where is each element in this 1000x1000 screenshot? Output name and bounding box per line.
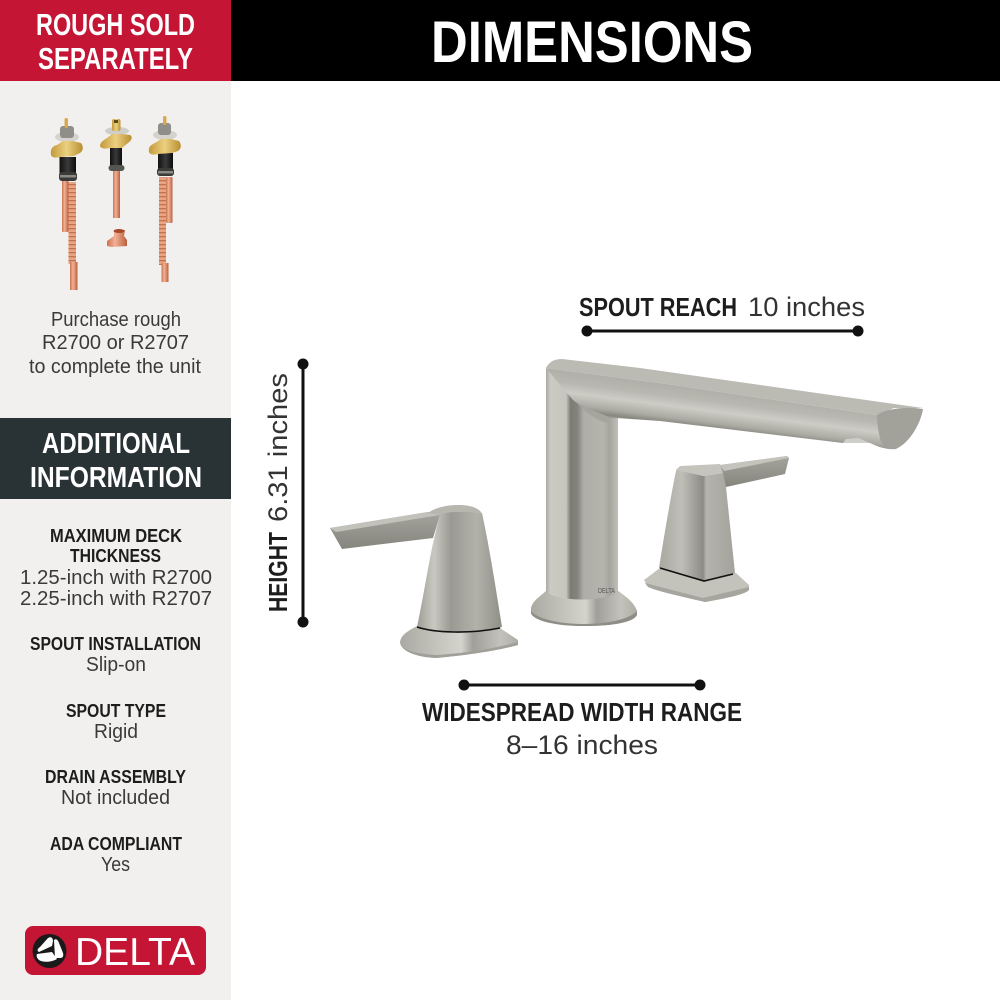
- sidebar panel: [0, 0, 231, 1000]
- text: purchase rough note: [29, 309, 201, 378]
- image: rough-in valves: [51, 116, 181, 290]
- spec: maximum deck thickness: 2.25-inch with R2707: [20, 588, 212, 610]
- faucet right handle: [644, 456, 789, 602]
- banner: rough sold separately: SEPARATELY: [38, 42, 193, 76]
- valve left: [51, 118, 83, 290]
- spec: ada compliant: Yes: [101, 854, 130, 876]
- faucet spout: DELTA: [598, 588, 615, 595]
- text: purchase rough note: to complete the unit: [29, 356, 201, 378]
- banner: rough sold separately: ROUGH SOLD: [36, 8, 195, 42]
- spec: maximum deck thickness: THICKNESS: [70, 546, 161, 566]
- spec: ada compliant: ADA COMPLIANT: [50, 834, 182, 854]
- spec: maximum deck thickness: [20, 526, 212, 610]
- faucet spout: [531, 359, 923, 626]
- banner: additional information: [0, 418, 231, 499]
- logo: Delta: [25, 926, 206, 975]
- faucet left handle: [330, 505, 518, 658]
- dimension: spout reach: 10 inches: [748, 292, 865, 322]
- dimension: height: 6.31 inches: [263, 373, 293, 522]
- spec: ada compliant: [50, 834, 182, 876]
- faucet illustration: [330, 359, 923, 658]
- banner: additional information: ADDITIONAL: [42, 428, 190, 460]
- valve right: [149, 116, 181, 282]
- dimension: height: [263, 358, 308, 628]
- dimension: spout reach: [579, 292, 865, 336]
- text: purchase rough note: Purchase rough: [51, 309, 181, 331]
- dimension: widespread width range: 8–16 inches: [506, 730, 658, 760]
- copper tee fitting: [107, 229, 127, 247]
- text: purchase rough note: R2700 or R2707: [42, 332, 189, 354]
- dimension: spout reach: SPOUT REACH: [579, 292, 737, 322]
- banner: rough sold separately: [0, 0, 231, 81]
- spec: spout type: [66, 701, 166, 743]
- title bar: dimensions: DIMENSIONS: [431, 10, 753, 75]
- title bar: dimensions: [231, 0, 1000, 81]
- dimension: widespread width range: WIDESPREAD WIDTH RANGE: [422, 697, 742, 727]
- spec: spout installation: [30, 634, 201, 676]
- spec: drain assembly: [45, 767, 186, 809]
- banner: additional information: INFORMATION: [30, 462, 202, 494]
- dimension: widespread width range: [422, 680, 742, 760]
- spec: spout type: Rigid: [94, 721, 138, 743]
- logo: Delta: DELTA: [75, 931, 195, 974]
- spec: drain assembly: Not included: [61, 787, 170, 809]
- spec: drain assembly: DRAIN ASSEMBLY: [45, 767, 186, 787]
- dimension: height: HEIGHT: [263, 532, 293, 612]
- spec: spout installation: SPOUT INSTALLATION: [30, 634, 201, 654]
- spec: spout type: SPOUT TYPE: [66, 701, 166, 721]
- spec: spout installation: Slip-on: [86, 654, 146, 676]
- spec: maximum deck thickness: 1.25-inch with R2700: [20, 567, 212, 589]
- spec: maximum deck thickness: MAXIMUM DECK: [50, 526, 182, 546]
- valve middle: [100, 119, 132, 218]
